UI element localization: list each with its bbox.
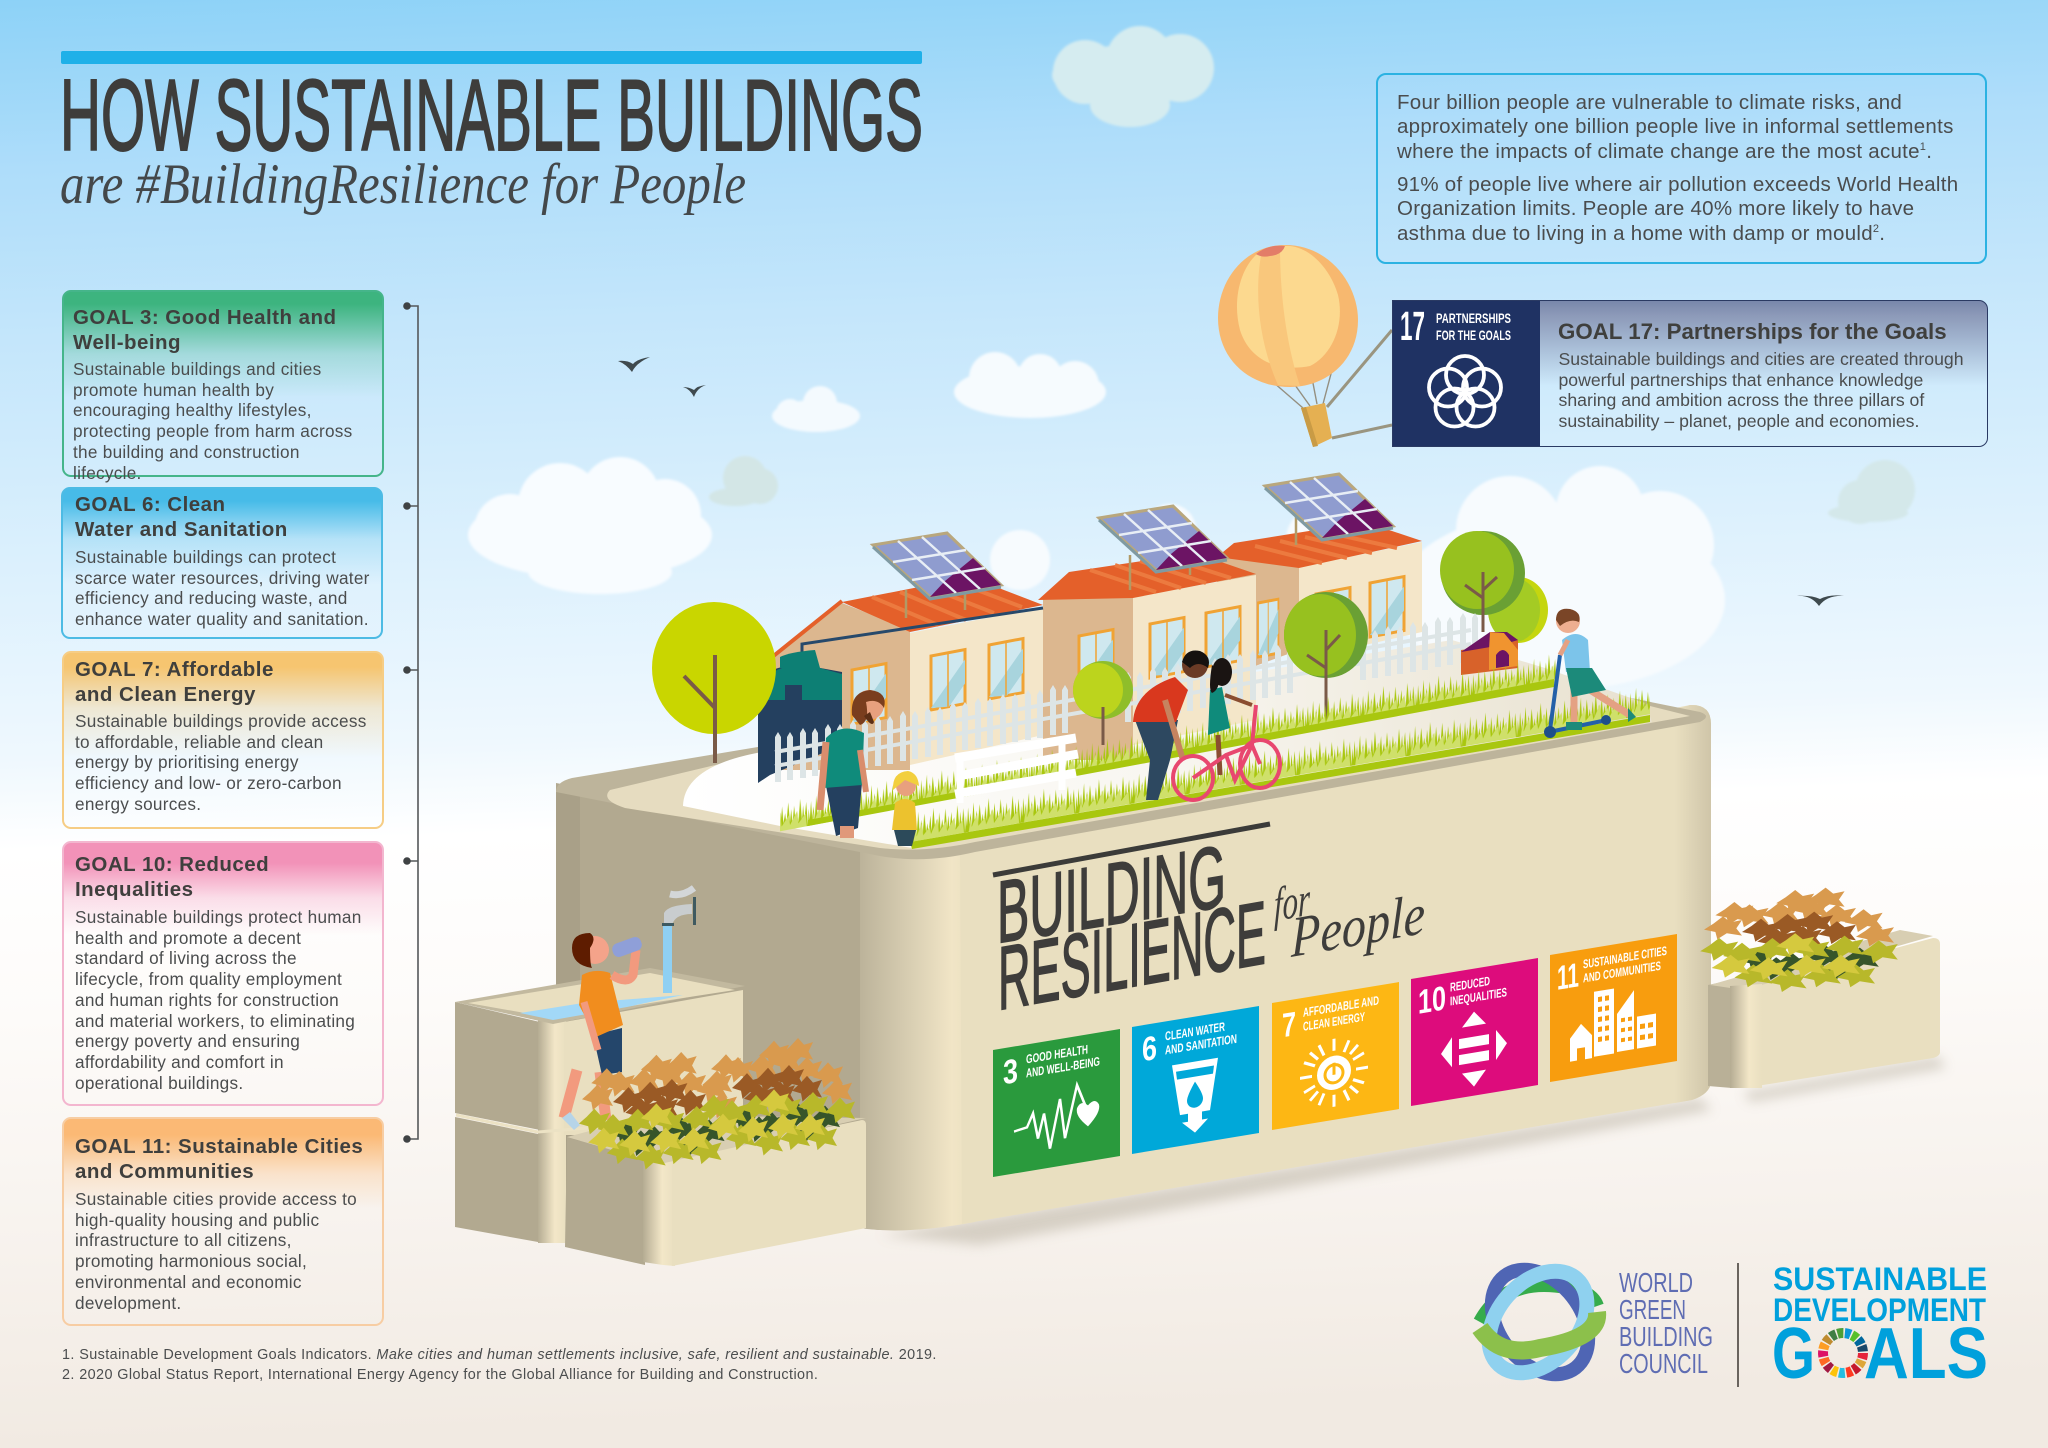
logo: Sustainable Development Goals (1772, 1261, 1988, 1394)
logo: WorldGBC name (1619, 1267, 1713, 1379)
panel: goal 7 (62, 651, 384, 829)
goal 7 heading: and Clean Energy (75, 683, 256, 706)
goal 17 tile: PARTNERSHIPS (1436, 311, 1511, 326)
goal 17 text: sustainability – planet, people and economies. (1558, 411, 1919, 431)
SDG tile 11 (1550, 934, 1677, 1082)
white paths on roof (683, 640, 1652, 848)
goal 17 heading: GOAL 17: Partnerships for the Goals (1558, 319, 1947, 344)
goal 6 text: efficiency and reducing waste, and (75, 588, 348, 608)
dog house (1461, 632, 1518, 675)
grass strip: back (780, 640, 1556, 840)
goal 11 heading (75, 1135, 363, 1183)
SDG tile 7: CLEAN ENERGY (1303, 1010, 1365, 1034)
goal 10 heading (75, 853, 269, 901)
SDG tile 3: 3 (1003, 1052, 1018, 1092)
cloud: top pale green (1052, 26, 1214, 127)
SDG tile 3 (993, 1029, 1120, 1177)
left planter (565, 1115, 866, 1266)
goal 6 heading: GOAL 6: Clean (75, 493, 226, 516)
footnotes: 1. Sustainable Development Goals Indicators. Make cities and human settlements inclusive, safe, resilient and sustainable. 2019. (62, 1347, 937, 1363)
goal 6 heading (75, 493, 288, 541)
solar panels (873, 474, 1393, 618)
tree: large left (652, 602, 776, 763)
logo: WorldGBC name: GREEN (1619, 1294, 1686, 1325)
SDG tile 10: INEQUALITIES (1450, 985, 1507, 1009)
footnotes (62, 1347, 937, 1383)
father and toddler (820, 690, 919, 846)
goal 10 heading: Inequalities (75, 878, 194, 901)
SDG tile 11: AND COMMUNITIES (1583, 959, 1661, 986)
cloud: pale green behind left cloud (709, 456, 778, 506)
goal 10 text: health and promote a decent (75, 928, 301, 948)
goal 6 text: Sustainable buildings can protect (75, 547, 336, 567)
goal 3 text: protecting people from harm across (73, 421, 353, 441)
goal 7 text: Sustainable buildings provide access (75, 711, 367, 731)
goal 6 text: scarce water resources, driving water (75, 568, 370, 588)
panel: goal 10 (62, 841, 384, 1106)
goal 10 text (75, 907, 362, 1093)
goal 7 text (75, 711, 367, 814)
fence (775, 613, 1478, 782)
tree: centre right (1284, 592, 1368, 723)
goal 11 heading: GOAL 11: Sustainable Cities (75, 1135, 363, 1158)
house row with solar panels (771, 474, 1422, 770)
info callout (1376, 73, 1987, 264)
SDG tile 3: GOOD HEALTH (1026, 1042, 1088, 1067)
info callout: where the impacts of climate change are the most acute1. (1397, 140, 1932, 163)
goal 3 heading (73, 306, 337, 354)
cloud: white mid (954, 352, 1106, 418)
goal 10 text: standard of living across the (75, 948, 297, 968)
heading on planter: for (1274, 873, 1310, 932)
goal 7 text: to affordable, reliable and clean (75, 732, 323, 752)
connector lines (403, 302, 418, 1143)
SDG tile 7: 7 (1282, 1005, 1296, 1045)
house 3 (1217, 522, 1422, 680)
goal 10 text: energy poverty and ensuring (75, 1031, 300, 1051)
goal 17 text: powerful partnerships that enhance knowledge (1558, 370, 1923, 390)
SDG tile 6 (1132, 1006, 1259, 1154)
SDG tile 6: 6 (1142, 1029, 1157, 1069)
tree: small middle (1073, 661, 1133, 745)
goal 10 heading: GOAL 10: Reduced (75, 853, 269, 876)
logo: Sustainable Development Goals: SUSTAINABLE (1773, 1261, 1987, 1297)
goal 6 heading: Water and Sanitation (75, 518, 288, 541)
SDG tile 11: SUSTAINABLE CITIES (1583, 944, 1667, 972)
right small planter (1708, 930, 1946, 1102)
goal 17 text (1558, 349, 1964, 431)
SDG tile 10: 10 (1418, 979, 1446, 1022)
goal 10 text: affordability and comfort in (75, 1052, 284, 1072)
goal 17 tile: 17 (1400, 303, 1425, 349)
goal 7 text: energy by prioritising energy (75, 752, 299, 772)
grass strip: front (908, 672, 1650, 856)
heading on planter: People (1290, 881, 1425, 970)
SDG tile 11: 11 (1557, 956, 1579, 998)
goal 3 text: the building and construction (73, 442, 300, 462)
goal 10 text: operational buildings. (75, 1073, 243, 1093)
father and daughter with bicycle (1133, 650, 1280, 800)
goal 10 text: and human rights for construction (75, 990, 339, 1010)
logo: WorldGBC name: COUNCIL (1619, 1348, 1708, 1379)
bench (955, 738, 1078, 803)
subtitle: are #BuildingResilience for People (60, 153, 746, 216)
goal 3 heading: GOAL 3: Good Health and (73, 306, 337, 329)
house 1 (771, 577, 1043, 770)
panel: goal 17 (1392, 300, 1988, 447)
SDG tile 7: AFFORDABLE AND (1303, 993, 1379, 1020)
logo: WorldGBC name: BUILDING (1619, 1321, 1713, 1352)
house 2 (1038, 553, 1278, 760)
goal 6 text (75, 547, 370, 629)
goal 11 text: development. (75, 1293, 181, 1313)
logo: Sustainable Development Goals: G (1772, 1314, 1815, 1394)
info callout: Four billion people are vulnerable to climate risks, and (1397, 91, 1902, 114)
goal 6 text: enhance water quality and sanitation. (75, 609, 369, 629)
top rule (61, 51, 922, 64)
goal 11 text: environmental and economic (75, 1272, 302, 1292)
heading on planter: RESILIENCE (998, 883, 1266, 1030)
goal 11 heading: and Communities (75, 1160, 254, 1183)
goal 11 text: promoting harmonious social, (75, 1251, 307, 1271)
wash basin block (455, 968, 745, 1243)
goal 3 text: Sustainable buildings and cities (73, 359, 321, 379)
heading on planter: BUILDING (997, 826, 1226, 962)
faucet and water stream (662, 888, 696, 993)
goal 3 text: lifecycle. (73, 463, 142, 483)
SDG tile 10 (1411, 958, 1538, 1106)
logo: Sustainable Development Goals: ALS (1864, 1314, 1988, 1394)
person drinking from bottle (562, 933, 643, 1130)
goal 7 heading: GOAL 7: Affordable (75, 658, 274, 681)
goal 10 text: and material workers, to eliminating (75, 1011, 355, 1031)
cloud: large faint behind houses (990, 466, 1725, 690)
SDG tile 10: REDUCED (1450, 974, 1490, 995)
logo: WorldGBC rings (1469, 1251, 1608, 1393)
info callout: approximately one billion people live in informal settlements (1397, 115, 1954, 138)
SDG tile 3: AND WELL-BEING (1026, 1054, 1100, 1081)
cloud: pale green right (1828, 460, 1915, 524)
panel: goal 6 (61, 487, 383, 639)
main planter: back wall and top (556, 697, 1712, 1245)
info callout: 91% of people live where air pollution exceeds World Health (1397, 173, 1958, 196)
goal 7 heading (75, 658, 274, 706)
goal 10 text: lifecycle, from quality employment (75, 969, 342, 989)
goal 11 text: infrastructure to all citizens, (75, 1230, 292, 1250)
cloud: large white left (468, 457, 712, 594)
goal 10 text: Sustainable buildings protect human (75, 907, 362, 927)
goal 11 text (75, 1189, 357, 1313)
SDG tile 7 (1272, 982, 1399, 1130)
goal 3 text: promote human health by (73, 380, 274, 400)
goal 17 text: Sustainable buildings and cities are created through (1558, 349, 1964, 369)
SDG tile 6: AND SANITATION (1165, 1032, 1237, 1058)
goal 3 text: encouraging healthy lifestyles, (73, 400, 312, 420)
goal 3 heading: Well-being (73, 331, 181, 354)
goal 11 text: Sustainable cities provide access to (75, 1189, 357, 1209)
goal 3 text (73, 359, 353, 483)
goal 11 text: high-quality housing and public (75, 1210, 319, 1230)
goal 17 text: sharing and ambition across the three pillars of (1558, 390, 1924, 410)
left shrub (579, 1038, 855, 1170)
water tank (758, 650, 842, 783)
SDG tile 6: CLEAN WATER (1165, 1020, 1225, 1044)
right shrub (1700, 888, 1898, 992)
info callout: asthma due to living in a home with damp or mould2. (1397, 222, 1885, 245)
boy on scooter (1544, 609, 1636, 738)
goal 7 text: efficiency and low- or zero-carbon (75, 773, 342, 793)
panel: goal 11 (62, 1117, 384, 1326)
cloud: small white (772, 386, 860, 432)
goal 7 text: energy sources. (75, 794, 201, 814)
hot air balloon (1218, 245, 1392, 447)
footnotes: 2. 2020 Global Status Report, International Energy Agency for the Global Alliance for Building and Construction. (62, 1367, 818, 1383)
goal 17 tile (1391, 299, 1540, 448)
logo: Sustainable Development Goals: DEVELOPMENT (1773, 1292, 1986, 1328)
panel: goal 3 (62, 290, 384, 477)
info callout: Organization limits. People are 40% more likely to have (1397, 197, 1914, 220)
logo: WorldGBC name: WORLD (1619, 1267, 1693, 1298)
title: HOW SUSTAINABLE BUILDINGS (60, 60, 923, 172)
logo divider (1737, 1263, 1739, 1387)
birds (618, 357, 1844, 606)
tree: back right (1440, 531, 1548, 643)
